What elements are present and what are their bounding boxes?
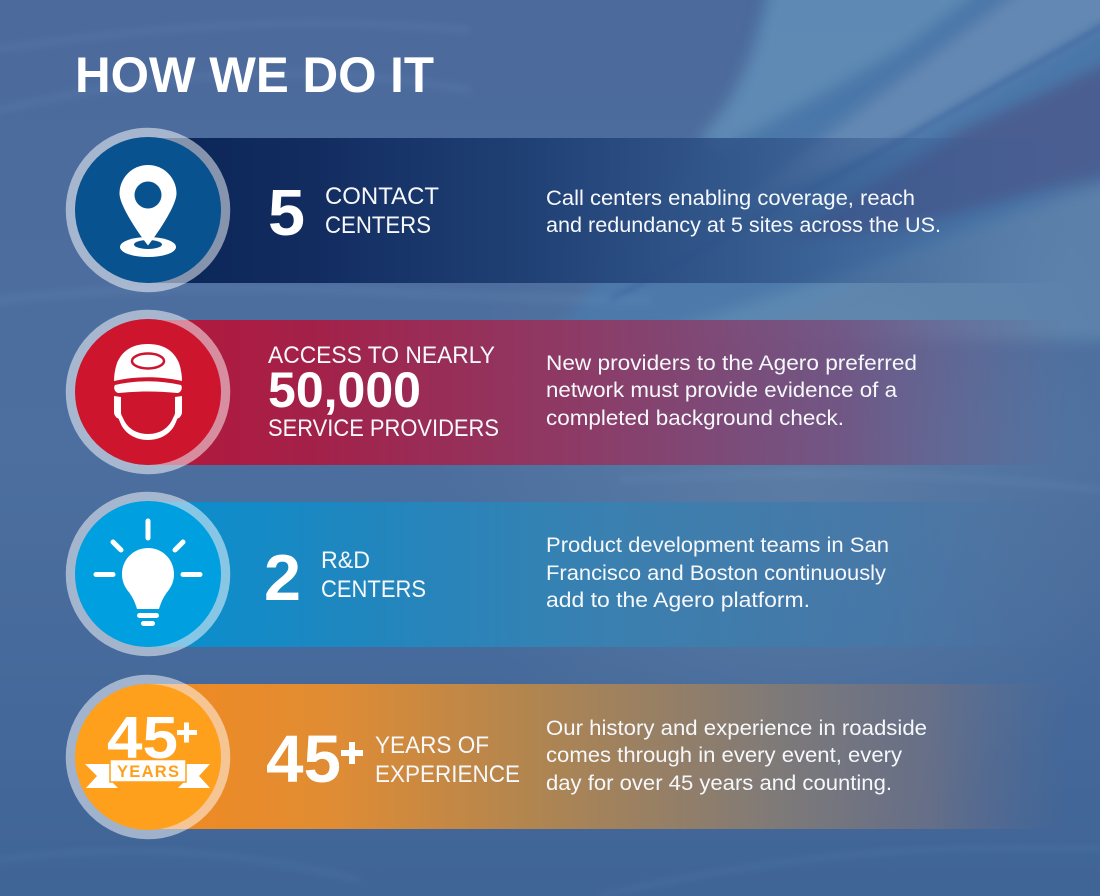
- description: years of experience: [546, 716, 927, 795]
- heading: r&d centers: CENTERS: [321, 576, 426, 603]
- heading: r&d centers: [321, 547, 426, 603]
- icon: 45+ years badge: [70, 680, 226, 834]
- description: service providers: completed background check.: [546, 406, 844, 430]
- heading: contact centers: [325, 183, 439, 239]
- heading: access to nearly 50,000 service providers: 50,000: [268, 362, 421, 418]
- icon: light bulb in circle: [70, 496, 226, 652]
- heading: access to nearly 50,000 service providers: SERVICE PROVIDERS: [268, 415, 499, 442]
- description: years of experience: Our history and experience in roadside: [546, 716, 927, 740]
- stat: 45+: 45: [266, 722, 341, 797]
- description: contact centers: Call centers enabling coverage, reach: [546, 186, 915, 210]
- panel: contact centers: [70, 132, 1070, 288]
- description: r&d centers: Product development teams in San: [546, 533, 889, 557]
- heading: years of experience: EXPERIENCE: [375, 761, 520, 788]
- panel: years of experience: [70, 680, 1070, 834]
- stat: 2: 2: [264, 541, 301, 614]
- description: years of experience: day for over 45 years and counting.: [546, 771, 892, 795]
- band: r&d centers: [148, 502, 1070, 647]
- heading: contact centers: CONTACT: [325, 183, 439, 210]
- top right light wedges: [560, 0, 1100, 340]
- description: r&d centers: [546, 533, 889, 612]
- description: service providers: network must provide evidence of a: [546, 378, 897, 402]
- description: r&d centers: add to the Agero platform.: [546, 588, 810, 612]
- title: HOW WE DO IT: [75, 47, 434, 103]
- icon: 45+ years badge: 45: [107, 705, 178, 771]
- panel: r&d centers: [70, 496, 1070, 652]
- description: contact centers: and redundancy at 5 sites across the US.: [546, 213, 941, 237]
- heading: contact centers: CENTERS: [325, 212, 431, 239]
- band: years of experience: [148, 684, 1070, 829]
- description: r&d centers: Francisco and Boston continuously: [546, 561, 886, 585]
- heading: years of experience: [375, 732, 520, 788]
- heading: access to nearly 50,000 service providers: [268, 342, 499, 442]
- icon: cap and face in circle: [70, 314, 226, 470]
- band: contact centers: [148, 138, 1070, 283]
- icon: map pin in circle: [70, 132, 226, 288]
- stat: 5: 5: [268, 176, 305, 249]
- heading: access to nearly 50,000 service providers: ACCESS TO NEARLY: [268, 342, 495, 369]
- heading: years of experience: YEARS OF: [375, 732, 489, 759]
- description: service providers: [546, 351, 917, 430]
- description: service providers: New providers to the Agero preferred: [546, 351, 917, 375]
- icon: 45+ years badge: YEARS: [117, 763, 179, 781]
- description: years of experience: comes through in every event, every: [546, 743, 902, 767]
- description: contact centers: [546, 186, 941, 237]
- band: service providers: [148, 320, 1070, 465]
- heading: r&d centers: R&D: [321, 547, 370, 574]
- panel: service providers: [70, 314, 1070, 470]
